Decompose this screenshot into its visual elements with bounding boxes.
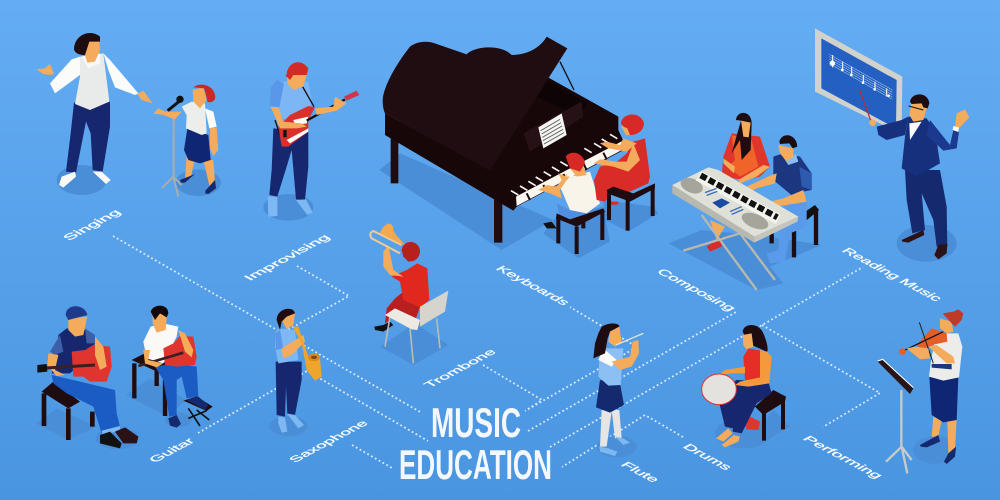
right guitarist [138, 306, 198, 428]
drummer bench [755, 390, 786, 441]
music teacher [869, 94, 969, 259]
title: EDUCATION [399, 441, 552, 488]
saxophone player [269, 309, 322, 436]
title [399, 399, 552, 488]
left guitarist [37, 306, 138, 448]
label: Singing: Singing [60, 208, 125, 243]
piano legs [391, 133, 502, 243]
boy's bench [556, 208, 605, 254]
teacher shadow [897, 225, 957, 262]
left bench [42, 382, 92, 440]
piano interior [537, 80, 587, 117]
label: Trombone: Trombone [421, 348, 500, 390]
chalkboard with notes [815, 28, 902, 132]
label: Reading Music: Reading Music [838, 246, 945, 303]
music stand [878, 359, 913, 473]
piano body [385, 77, 627, 211]
composing man [747, 135, 812, 263]
illustration: drums and performing [702, 309, 963, 473]
singing girl [153, 85, 218, 194]
dotted connector lines [113, 236, 880, 468]
lid prop [560, 62, 574, 90]
illustration: composing and reading music [668, 28, 969, 290]
singing teacher [37, 33, 153, 188]
label: Improvising: Improvising [241, 233, 334, 283]
title: MUSIC [431, 399, 521, 446]
trombone player on chair [370, 224, 448, 363]
drummer [702, 325, 772, 447]
composing floor shadow [668, 230, 822, 290]
chair shadow [380, 323, 448, 365]
composing woman [707, 113, 770, 252]
sheet music [538, 113, 567, 148]
illustration: trombone and flute [370, 224, 643, 457]
violinist [899, 309, 963, 464]
piano lid [383, 37, 567, 171]
drummer shadows [757, 410, 790, 440]
guitarist figure [268, 62, 359, 217]
illustration: grand piano and pianists [379, 37, 658, 258]
bench [772, 205, 819, 257]
guitarist shadow [263, 194, 313, 221]
label: Saxophone: Saxophone [286, 419, 372, 465]
microphone stand [162, 96, 184, 197]
floor shadows [36, 378, 187, 440]
footstool [183, 397, 213, 426]
teacher shadow [57, 165, 107, 195]
flute player [593, 324, 643, 457]
woman's bench [607, 183, 655, 231]
music desk [523, 102, 583, 152]
floor shadows [379, 153, 658, 258]
illustration: improvising guitarist [263, 62, 359, 221]
boy pianist [538, 153, 602, 228]
pointer [859, 89, 872, 124]
label: Guitar: Guitar [146, 437, 198, 465]
illustration: guitar students [36, 306, 322, 449]
keyboard stand [683, 215, 775, 290]
right bench [132, 354, 183, 416]
label: Flute: Flute [617, 460, 662, 484]
piano keys [511, 134, 625, 206]
label: Drums: Drums [679, 442, 735, 472]
electronic keyboard [672, 167, 798, 243]
girl shadow [176, 169, 221, 196]
label: Keyboards: Keyboards [492, 264, 572, 307]
label: Performing: Performing [799, 434, 885, 480]
illustration: singing [37, 33, 221, 197]
woman pianist [593, 115, 650, 205]
label: Composing: Composing [653, 267, 739, 313]
